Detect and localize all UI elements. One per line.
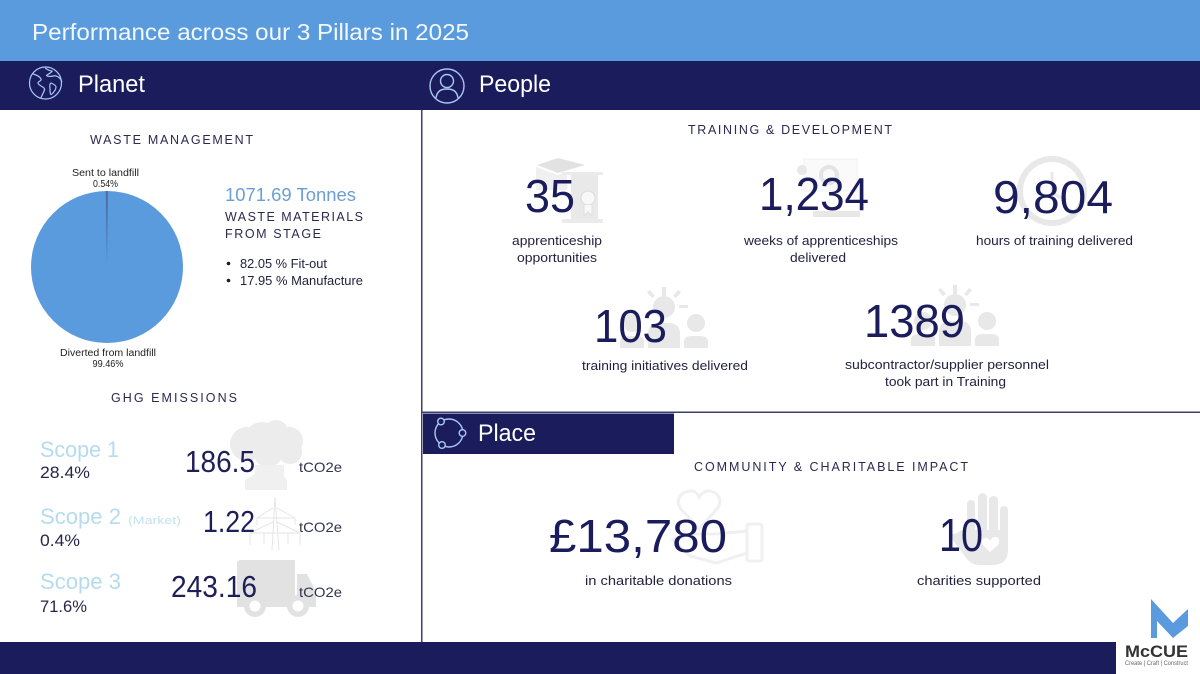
icon: raised hand with heart xyxy=(951,493,1008,565)
scope 3: 243.16 xyxy=(171,569,257,604)
waste total: 1071.69 Tonnes xyxy=(225,184,356,205)
panel: training and development xyxy=(512,123,1133,389)
stat: training initiatives xyxy=(582,300,748,373)
heading: People: People xyxy=(479,71,551,98)
stat: hours of training: 9,804 xyxy=(993,171,1113,223)
title: Performance across our 3 Pillars in 2025 xyxy=(32,19,469,45)
icon: clock xyxy=(1020,159,1084,223)
logo: McCUE: Create | Craft | Construct xyxy=(1125,661,1188,667)
logo: McCUE: McCUE xyxy=(1125,642,1188,661)
stat: charitable donations: £13,780 xyxy=(549,510,727,562)
waste stage list: 17.95 % Manufacture xyxy=(240,274,363,288)
scope 2: 0.4% xyxy=(40,532,80,550)
icon: delivery truck xyxy=(237,560,316,617)
stat: apprenticeship opportunities xyxy=(512,170,602,265)
stat: weeks of apprenticeships xyxy=(743,168,899,265)
heading: Planet: Planet xyxy=(78,71,145,98)
panel: waste management xyxy=(31,133,363,370)
stat: weeks of apprenticeships: delivered xyxy=(790,250,846,265)
scope 2 xyxy=(40,504,342,550)
scope 3: 71.6% xyxy=(40,598,87,616)
icon: people with idea xyxy=(620,287,708,348)
stat: charities supported: 10 xyxy=(939,509,983,561)
panel: place xyxy=(423,414,1041,588)
pie chart: 99.46% xyxy=(92,359,124,370)
scope 1: 186.5 xyxy=(185,444,255,479)
stat: subcontractor and supplier personnel: subcontractor/supplier personnel xyxy=(845,357,1049,372)
heading: GHG emissions: GHG EMISSIONS xyxy=(111,391,237,405)
header band xyxy=(0,0,1200,61)
stat: charities supported: charities supported xyxy=(917,573,1041,588)
waste subtitle xyxy=(225,210,363,241)
scope 1: 28.4% xyxy=(40,464,90,482)
heading bar: Place: Place xyxy=(478,420,536,447)
pie chart: 0.54% xyxy=(93,179,118,190)
stat: apprenticeship opportunities: opportunities xyxy=(517,250,598,265)
stat: subcontractor and supplier personnel: took part in Training xyxy=(885,374,1006,389)
heading: waste management: WASTE MANAGEMENT xyxy=(90,133,253,147)
scope 1: Scope 1 xyxy=(40,437,119,462)
icon: globe xyxy=(30,67,62,99)
waste subtitle: FROM STAGE xyxy=(225,227,321,241)
stat: subcontractor and supplier personnel xyxy=(845,295,1049,389)
scope 1 xyxy=(40,437,342,482)
icon: graduation cap and certificate xyxy=(536,158,603,223)
navy heading bar: Planet and People xyxy=(0,61,1200,110)
stat: charitable donations: in charitable donations xyxy=(585,573,733,588)
stat: hours of training: hours of training delivered xyxy=(976,233,1133,248)
stat: charitable donations xyxy=(549,510,733,588)
stat: apprenticeship opportunities: 35 xyxy=(525,170,575,222)
icon: electricity pylon xyxy=(250,497,300,550)
stat: hours of training xyxy=(976,171,1133,248)
stat: training initiatives: 103 xyxy=(594,300,667,352)
heading: training and development: TRAINING & DEVELOPMENT xyxy=(688,123,892,137)
pie chart: Sent to landfill xyxy=(72,168,139,179)
waste stage list xyxy=(227,257,363,288)
scope 2: 1.22 xyxy=(203,504,255,539)
panel: GHG emissions xyxy=(40,391,342,617)
footer band xyxy=(0,642,1116,674)
stat: apprenticeship opportunities: apprenticeship xyxy=(512,233,602,248)
scope 1: tCO2e xyxy=(299,459,342,475)
icon: people with idea xyxy=(911,285,999,346)
scope 3: Scope 3 xyxy=(40,569,121,594)
stat: weeks of apprenticeships: weeks of apprenticeships xyxy=(743,233,899,248)
scope 3 xyxy=(40,569,342,616)
logo: McCUE xyxy=(1125,599,1188,667)
heading: community and charitable impact: COMMUNITY & CHARITABLE IMPACT xyxy=(694,460,968,474)
scope 3: tCO2e xyxy=(299,584,342,600)
stat: training initiatives: training initiatives delivered xyxy=(582,358,748,373)
icon: person xyxy=(430,69,464,103)
icon: factory smoke xyxy=(230,420,303,490)
panel dividers xyxy=(421,110,1200,642)
stat: charities supported xyxy=(917,509,1041,588)
stat: weeks of apprenticeships: 1,234 xyxy=(759,168,869,220)
pie chart: Diverted from landfill xyxy=(60,348,156,359)
icon: connected circle xyxy=(435,418,466,448)
stat: subcontractor and supplier personnel: 1389 xyxy=(864,295,965,347)
scope 2: (Market) xyxy=(128,515,181,527)
scope 2: tCO2e xyxy=(299,519,342,535)
scope 2: Scope 2 xyxy=(40,504,121,529)
icon: hand holding heart xyxy=(673,491,762,563)
waste stage list: 82.05 % Fit-out xyxy=(240,257,328,271)
heading bar: Place xyxy=(423,414,674,454)
pie chart xyxy=(31,168,183,370)
waste subtitle: WASTE MATERIALS xyxy=(225,210,363,224)
icon: training presentation and gear xyxy=(797,159,860,217)
